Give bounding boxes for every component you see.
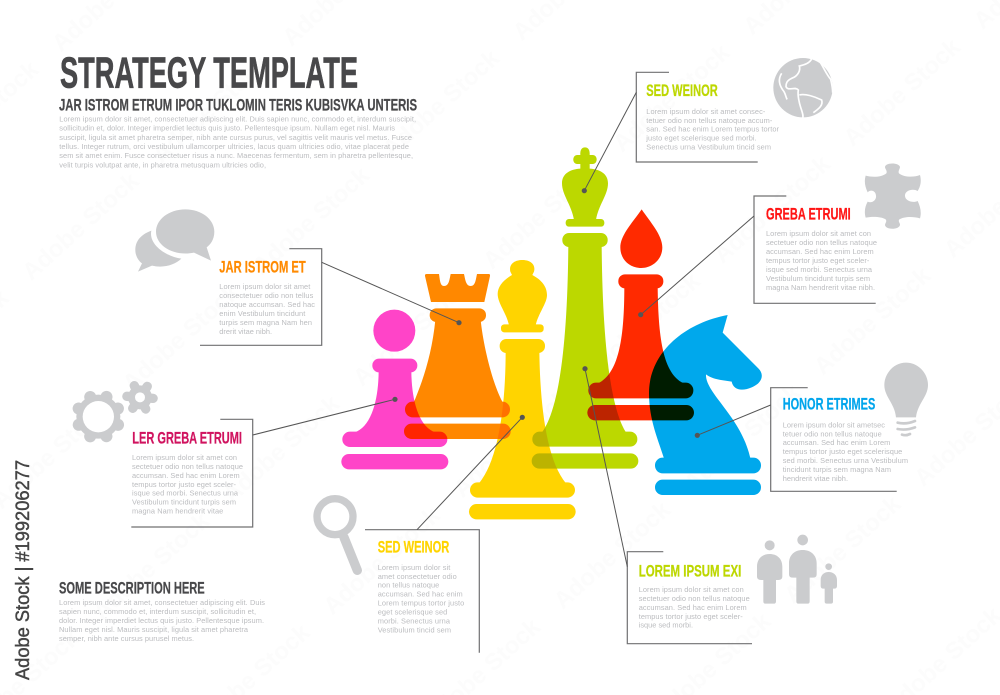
text: sed weinor green: Senectus urna Vestibulum tincid sem [646, 142, 771, 152]
text: jar istrom et: Lorem ipsum dolor sit amet [219, 282, 310, 291]
text: ler greba etrumi: magna Nam hendrerit vitae [132, 506, 223, 516]
card: jar istrom et [200, 249, 322, 345]
text: greba etrumi: sectetuer odio non tellus natoque [766, 238, 877, 247]
text: ler greba etrumi: sectetuer odio non tellus natoque [132, 462, 243, 471]
text: sed weinor green: san. Sed hac enim Lorem tempus tortor [646, 124, 780, 134]
queen: red [587, 209, 694, 420]
text: sed weinor green: Lorem ipsum dolor sit amet consec- [646, 107, 766, 116]
text: honor etrimes: tetuer odio non tellus natoque [783, 430, 882, 438]
intro paragraph [59, 114, 416, 169]
text: honor etrimes: hendrerit vitae nibh. [783, 474, 848, 483]
text: jar istrom et: turpis sem magna Nam hen [219, 318, 312, 327]
text: lorem ipsum exi: tempus tortor justo eget sceler- [639, 612, 743, 621]
text: honor etrimes [783, 420, 908, 483]
intro paragraph: velit turpis volutpat ante, in pharetra metusquam ultricies odio, [59, 160, 266, 169]
text: ler greba etrumi [132, 453, 243, 516]
card: honor etrimes [771, 388, 908, 491]
card: sed weinor yellow [365, 530, 479, 653]
text: jar istrom et: natoque accumsan. Sed hac [219, 300, 315, 309]
heading: lorem ipsum exi: LOREM IPSUM EXI [639, 562, 741, 580]
icon: light bulb [884, 363, 928, 435]
heading: greba etrumi: GREBA ETRUMI [766, 205, 851, 223]
text: description: sapien nunc, commodo et, interdum suscipit, sollicitudin et, [59, 607, 256, 616]
text: description: dolor. Integer imperdiet lectus quis justo. Pellentesque ipsum. [59, 616, 264, 625]
bishop: yellow [469, 260, 576, 519]
heading: sed weinor yellow: SED WEINOR [378, 538, 449, 556]
title: STRATEGY TEMPLATE [60, 50, 358, 98]
text: ler greba etrumi: tempus tortor justo eget sceler- [132, 480, 237, 489]
text: sed weinor yellow: amet consectetuer odio [378, 572, 457, 581]
pawn: magenta [341, 310, 448, 469]
text: ler greba etrumi: Vestibulum tincidunt turpis sem [132, 498, 236, 506]
icon: people [757, 535, 837, 604]
text: description: Nullam eget nisl. Mauris suscipit, ligula sit amet pharetra [59, 625, 249, 634]
text: jar istrom et: drerit vitae nibh. [219, 327, 272, 336]
leader lines with dots [253, 92, 771, 567]
text: sed weinor yellow: non tellus natoque [378, 580, 439, 590]
text: description [59, 598, 265, 643]
text: sed weinor yellow: morbi. Senectus urna [378, 616, 451, 626]
intro paragraph: suscipit, ligula sit amet pharetra semper, nibh ante cursus purus, vel sagittis velit mauris vel metus. Fusce [59, 133, 412, 142]
card: greba etrumi [754, 196, 877, 303]
text: honor etrimes: accumsan. Sed hac enim Lorem [783, 438, 890, 447]
intro paragraph: sollicitudin et, dolor. Integer imperdiet lectus quis justo. Pellentesque ipsum. Nullam eget nisl. Mauris [59, 124, 395, 133]
knight: blue [649, 315, 762, 495]
text: sed weinor yellow [378, 563, 464, 634]
text: sed weinor green: tetuer odio non tellus natoque accum- [646, 116, 773, 125]
intro paragraph: sem sit amet enim. Fusce consectetuer risus a nunc. Maecenas fermentum, sem in pharetra pellentesque, [59, 151, 413, 160]
text: description: semper, nibh ante cursus purusel metus. [59, 634, 194, 643]
text: lorem ipsum exi: Lorem ipsum dolor sit amet con [639, 585, 744, 594]
card: sed weinor green [636, 72, 780, 162]
text: sed weinor yellow: eget scelerisque sed [378, 608, 447, 616]
rook: orange [404, 274, 511, 439]
icon: magnifier [317, 499, 357, 570]
text: sed weinor yellow: Vestibulum tincid sem [378, 626, 451, 634]
text: greba etrumi: magna Nam hendrerit vitae nibh. [766, 283, 875, 292]
text: greba etrumi: isque sed morbi. Senectus urna [766, 265, 873, 274]
text: lorem ipsum exi: isque sed morbi. [639, 620, 693, 630]
text: ler greba etrumi: Lorem ipsum dolor sit amet con [132, 453, 237, 462]
icon: globe [773, 58, 833, 118]
heading: honor etrimes: HONOR ETRIMES [783, 395, 875, 413]
text: honor etrimes: Lorem ipsum dolor sit ametsec [783, 420, 885, 430]
text: jar istrom et: enim Vestibulum tincidunt [219, 309, 305, 318]
text: sed weinor yellow: Lorem ipsum dolor sit [378, 563, 450, 572]
heading: jar istrom et: JAR ISTROM ET [219, 259, 306, 277]
king: green [532, 147, 638, 469]
text: greba etrumi: Lorem ipsum dolor sit amet con [766, 229, 871, 238]
text: greba etrumi: accumsan. Sed hac enim Lorem [766, 247, 874, 256]
stock id label: Adobe Stock | #199206277 [13, 460, 34, 680]
icon: puzzle piece [865, 163, 921, 229]
text: jar istrom et: consectetuer odio non tellus [219, 291, 314, 300]
text: sed weinor yellow: accumsan. Sed hac enim [378, 590, 463, 598]
text: lorem ipsum exi: accumsan. Sed hac enim Lorem [639, 603, 747, 612]
icon: gears [70, 381, 156, 445]
heading: sed weinor green: SED WEINOR [646, 82, 718, 100]
text: sed weinor yellow: Lorem tempus tortor justo [378, 598, 464, 608]
text: greba etrumi: Vestibulum tincidunt turpis sem [766, 274, 870, 283]
intro paragraph: Lorem ipsum dolor sit amet, consectetuer adipiscing elit. Duis sapien nunc, commodo et, interdum suscipit, [59, 114, 416, 124]
text: honor etrimes: tempus tortor justo eget scelerisque [783, 447, 902, 456]
intro paragraph: tellus. Integer rutrum, orci vestibulum ullamcorper ultricies, lacus quam ultricies odio, vitae placerat pede [59, 142, 409, 151]
text: lorem ipsum exi: sectetuer odio non tellus natoque [639, 594, 750, 603]
text: greba etrumi: tempus tortor justo eget sceler- [766, 256, 870, 265]
icon: speech bubbles [135, 209, 214, 272]
chess pieces [341, 147, 762, 519]
description block [59, 580, 265, 643]
heading: some description here: SOME DESCRIPTION HERE [59, 580, 205, 598]
subtitle: JAR ISTROM ETRUM IPOR TUKLOMIN TERIS KUBISVKA UNTERIS [59, 96, 417, 114]
text: jar istrom et [219, 282, 315, 336]
text: honor etrimes: tincidunt turpis sem magna Nam [783, 465, 891, 474]
text: lorem ipsum exi [639, 585, 750, 630]
text: greba etrumi [766, 229, 877, 292]
heading: ler greba etrumi: LER GREBA ETRUMI [132, 429, 242, 447]
text: ler greba etrumi: accumsan. Sed hac enim Lorem [132, 471, 240, 480]
text: honor etrimes: sed morbi. Senectus urna Vestibulum [783, 456, 908, 465]
text: sed weinor green: justo eget scelerisque sed morbi. [645, 134, 757, 142]
text: description: Lorem ipsum dolor sit amet, consectetuer adipiscing elit. Duis [59, 598, 265, 607]
card: lorem ipsum exi [627, 552, 752, 644]
card: ler greba etrumi [131, 419, 253, 527]
text: ler greba etrumi: isque sed morbi. Senectus urna [132, 488, 239, 498]
text: sed weinor green [645, 107, 780, 152]
